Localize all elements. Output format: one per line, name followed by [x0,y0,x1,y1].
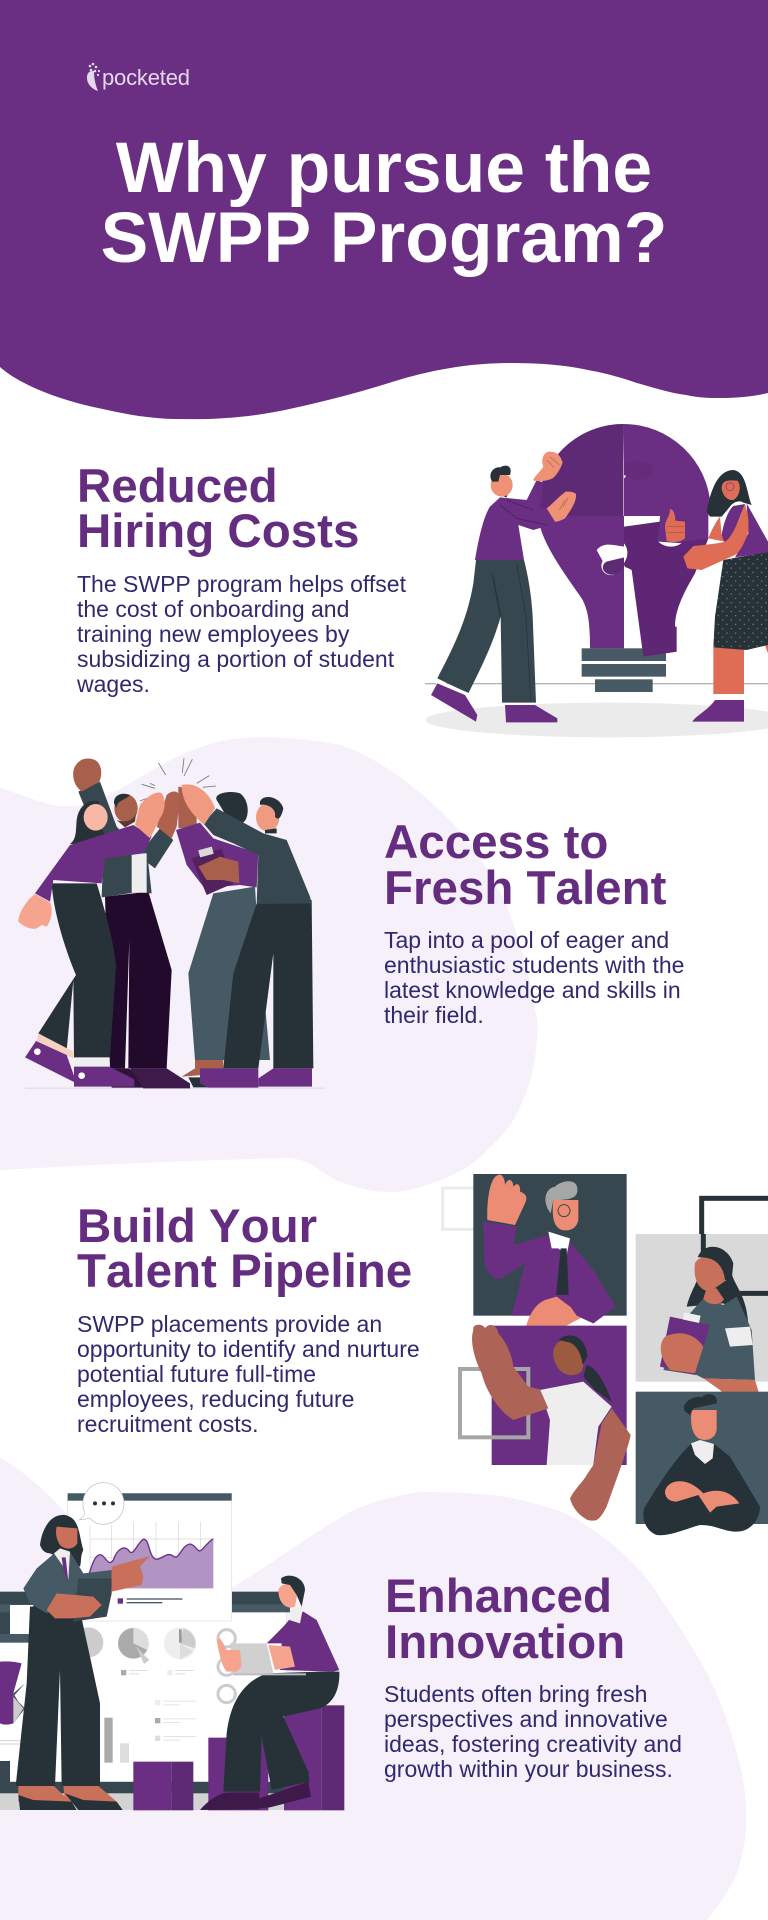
text: reduced hiring costs: training new employees by [77,621,350,647]
background blob: innovation section [0,1458,746,1920]
text: build your talent pipeline: SWPP placements provide an [77,1311,382,1337]
heading: access to fresh talent: Access to [384,816,608,869]
dashboard screen [0,1592,290,1810]
seated man with laptop [200,1576,339,1810]
text: reduced hiring costs [76,571,407,697]
illustration: team presenting dashboards [0,1483,344,1810]
panel: grey haired man [473,1174,627,1345]
text: build your talent pipeline: potential future full-time [77,1361,316,1387]
text: enhanced innovation: perspectives and innovative [384,1706,668,1732]
header banner with wave [0,0,768,419]
illustration: people assembling lightbulb puzzle [425,424,768,737]
text: build your talent pipeline: recruitment costs. [77,1411,258,1437]
panel: woman with clipboard [636,1234,768,1403]
heading: enhanced innovation: Innovation [385,1616,625,1669]
text: enhanced innovation: ideas, fostering creativity and [384,1731,682,1757]
panel: man with crossed arms [636,1392,768,1535]
text: access to fresh talent: their field. [384,1002,484,1028]
presenter woman [16,1515,150,1810]
text: enhanced innovation: Students often bring fresh [384,1681,647,1707]
chart window [68,1493,232,1621]
man on the right [182,784,313,1088]
man [431,452,576,722]
illustration: team high five [18,758,325,1089]
heading: build your talent pipeline: Build Your [77,1200,317,1253]
text: reduced hiring costs: wages. [76,671,150,697]
woman [665,470,768,722]
heading: build your talent pipeline: Talent Pipeline [77,1245,412,1298]
text: access to fresh talent [384,927,684,1028]
line chart [89,1539,213,1588]
text: access to fresh talent: latest knowledge and skills in [384,977,681,1003]
text: reduced hiring costs: subsidizing a portion of student [77,646,395,672]
heading: enhanced innovation: Enhanced [385,1570,612,1623]
illustration: remote team video grid [443,1174,768,1535]
panel: woman in white shirt [460,1325,631,1521]
logo: pocketed: pocketed [102,65,190,90]
text: build your talent pipeline [77,1311,420,1437]
heading: reduced hiring costs: Reduced [77,460,278,513]
heading: access to fresh talent [384,816,667,915]
heading: reduced hiring costs [77,460,359,558]
woman on the left [18,792,165,1087]
bulb base [582,648,666,692]
text: access to fresh talent: Tap into a pool of eager and [384,927,669,953]
title [101,128,667,278]
title: Why pursue the [116,128,652,208]
person with clipboard [176,787,270,1087]
text: build your talent pipeline: opportunity to identify and nurture [77,1336,420,1362]
lightbulb [535,424,711,657]
speech bubble [79,1483,124,1524]
text: access to fresh talent: enthusiastic students with the [384,952,684,978]
text: reduced hiring costs: the cost of onboarding and [77,596,349,622]
text: build your talent pipeline: employees, reducing future [77,1386,354,1412]
heading: enhanced innovation [385,1570,625,1669]
text: reduced hiring costs: The SWPP program helps offset [77,571,407,597]
burst lines [140,758,216,801]
man with dark jacket [73,759,190,1088]
icon: feather [87,63,100,91]
heading: reduced hiring costs: Hiring Costs [77,505,359,558]
title: SWPP Program? [101,198,667,278]
heading: access to fresh talent: Fresh Talent [384,862,667,915]
background blob: talent section [0,737,538,1192]
text: enhanced innovation: growth within your business. [384,1756,673,1782]
ground [426,703,768,737]
purple boxes [133,1705,344,1810]
heading: build your talent pipeline [77,1200,412,1298]
text: enhanced innovation [384,1681,682,1782]
